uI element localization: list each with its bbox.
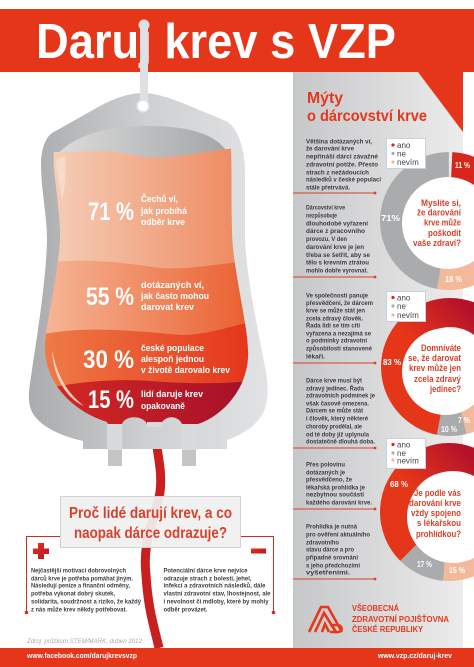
myth text 5: lékařská prohlídka je (306, 484, 365, 492)
myth text 6: zdravotního (306, 540, 339, 546)
myth text 4: dostatečně dlouhá doba. (306, 438, 375, 446)
myth text 3 (306, 292, 373, 360)
source: Zdroj: průzkum STEM/MARK, duben 2012 (26, 637, 142, 645)
logo text: VŠEOBECNÁ (352, 604, 399, 613)
myth text 2: dlouhodobé vyřazení (306, 220, 369, 228)
logo text: ZDRAVOTNÍ POJIŠŤOVNA (352, 615, 449, 624)
myth text 3: zcela zdravý člověk. (306, 316, 363, 322)
myth text 3: přesvědčení, že dárcem (306, 300, 373, 307)
myth text 3: vyřazena a nezajímá se (306, 330, 371, 338)
question box (60, 496, 240, 548)
donut chart 1: 71% (381, 214, 400, 223)
text: reasons for: potřeba vykonat dobrý skutek, (31, 590, 115, 598)
text: reasons for: Nejčastější motivací dobrovolných (31, 568, 126, 574)
myth text 4: choroby prodělal, ale (306, 424, 362, 430)
logo text: ČESKÉ REPUBLIKY (352, 625, 424, 634)
myth text 4: Dárce krve musí být (306, 378, 363, 384)
myth text 3: krve se může stát jen (306, 306, 365, 314)
donut chart 3: 15 % (449, 566, 465, 575)
question 2: jedinec? (429, 384, 461, 395)
myth text 1: Většina dotázaných ví, (306, 138, 372, 146)
legend 2 (386, 292, 426, 322)
myth text 4: i člověk, který některé (306, 416, 368, 422)
myth text 5: dotázaných je (306, 470, 345, 476)
myth text 5: každého darování krve. (306, 500, 372, 506)
text: reasons against: odběr provázet. (164, 606, 208, 614)
donut chart 2 (383, 312, 474, 434)
myth text 5: přesvědčeno, že (306, 476, 352, 484)
myth text 6: pro ověření aktuálního (306, 532, 370, 538)
stat 30 %: alespoň jednou (141, 354, 204, 364)
stat 71 %: Čechů ví, (141, 193, 178, 204)
legend 3 (386, 438, 426, 468)
legend 1: ano (397, 141, 411, 150)
blood bag (29, 20, 268, 466)
legend 2: ne (397, 302, 406, 311)
question 2: zcela zdravý (414, 374, 462, 385)
myth text 2: Dárcovství krve (306, 204, 345, 212)
question 1: krve může (424, 218, 461, 228)
donut chart 2: 7 % (458, 416, 470, 425)
myth text 6: s jeho předchozími (306, 562, 360, 570)
myth text 6: případné srovnání (306, 554, 359, 562)
text: reasons for: Následují peníze a finanční odměny, (31, 582, 130, 590)
panel: myths background (293, 72, 463, 648)
myth text 1: nepřináší dárci závažné (306, 154, 378, 160)
myth text 2: nezpůsobuje (306, 212, 337, 220)
stat 30 % (83, 343, 230, 375)
question 3: prohlídkou? (416, 529, 461, 540)
myth text 5: Přes polovinu (306, 462, 345, 468)
connectors (107, 422, 197, 466)
myth text 1: následků v české populaci (306, 176, 381, 184)
stat 55 %: dotázaných ví, (141, 280, 204, 290)
question 1 (413, 198, 462, 249)
text: reasons against: vlastní zdravotní stav, lhostejnost, ale (164, 590, 271, 598)
myths heading: o dárcovství krve (307, 108, 427, 125)
myths heading (307, 90, 427, 125)
myth text 2 (306, 204, 370, 274)
myth text 2: provozu. V den (306, 236, 347, 243)
question 3: s lékařskou (417, 518, 461, 529)
legend 3: ano (397, 440, 411, 450)
myth text 2: třeba se šetřit, aby se (306, 252, 370, 259)
stat 15 % (88, 386, 203, 414)
question 3 (409, 488, 461, 540)
stat 71 %: 71 % (88, 198, 134, 226)
myth text 3: Řada lidí se tím cítí (306, 320, 361, 330)
text: reasons against: Potenciální dárce krve nejvíce (164, 568, 248, 574)
donut chart 3: 17 % (417, 560, 432, 569)
text: reasons for: z nás může krev někdy potřebovat. (31, 606, 127, 614)
footer link vzp: www.vzp.cz/daruj-krev (377, 651, 453, 660)
myth text 4: zdravotních podmínek je (306, 392, 375, 400)
donut chart 1 (381, 161, 474, 284)
myth text 6 (306, 524, 370, 576)
donut chart 3: 68 % (390, 480, 408, 489)
myth text 6: stavu dárce a pro (306, 546, 354, 554)
legend 2: ano (397, 294, 411, 302)
donut chart 1: 11 % (455, 161, 470, 170)
myth text 2: darování krve je jen (306, 244, 364, 251)
question 2: Domníváte (421, 343, 461, 354)
legend 2: nevím (397, 311, 419, 320)
myth text 4: však časově omezena. (306, 400, 369, 408)
myth text 1: že darování krve (306, 146, 354, 152)
text: reasons against: infekcí a zdravotních následků, dále (164, 582, 266, 590)
myth text 2: tělo s krevním ztrátou (306, 260, 369, 266)
question box: naopak dárce odrazuje? (74, 525, 227, 542)
question 1: že darování (417, 208, 461, 218)
question 3: darování krve (409, 498, 461, 509)
donut chart 2: 83 % (383, 358, 401, 367)
legend 3: nevím (397, 456, 419, 466)
myth text 1: strach z nežádoucích (306, 170, 369, 176)
question 1: poškodit (428, 228, 462, 239)
stat 71 %: jak probíhá (140, 206, 188, 216)
footer band (0, 648, 474, 667)
myth text 4: Dárcem se může stát (306, 406, 364, 414)
icon: plus (33, 543, 49, 559)
question 1: Myslíte si, (421, 198, 461, 209)
bag body (29, 93, 268, 449)
icon: minus (251, 548, 266, 554)
text: reasons for (31, 568, 141, 614)
stat 30 %: 30 % (83, 346, 134, 374)
legend 1 (386, 138, 426, 168)
legend 3: ne (397, 449, 406, 458)
hanger tube (137, 20, 150, 112)
myth text 1: zdravotní potíže. Přesto (306, 162, 378, 168)
myth text 2: dárce z pracovního (306, 228, 365, 235)
stat 15 %: lidí daruje krev (141, 389, 203, 399)
myth text 3: Ve společnosti panuje (306, 292, 368, 300)
title: Daruj krev s VZP (36, 15, 396, 69)
question 2: se, že darovat (408, 353, 462, 364)
stat 71 %: odběr krve (141, 217, 185, 227)
stat 30 %: české populace (141, 343, 204, 353)
question 3: Je podle vás (414, 488, 461, 499)
myth text 4: zdravý jedinec. Řada (306, 384, 364, 392)
brackets (25, 536, 275, 614)
stat 55 % (86, 280, 209, 312)
donut chart 3 (390, 458, 474, 575)
question 2 (408, 343, 462, 395)
myth text 5: nezbytnou součástí (306, 492, 365, 498)
myth text 6: vyšetřeními. (306, 570, 350, 576)
myth text 1: stále přetrvává. (306, 184, 350, 192)
question box: Proč lidé darují krev, a co (69, 505, 232, 522)
bag inner shade (55, 126, 231, 165)
text: reasons against: odrazuje strach z bolesti, jehel, (164, 576, 252, 582)
myth text 6: Prohlídka je nutná (306, 524, 357, 530)
stat 15 %: opakovaně (141, 401, 185, 411)
legend 1: nevím (397, 158, 419, 167)
logo mark (309, 607, 342, 632)
myth text 4 (306, 378, 375, 446)
myth text 5 (306, 462, 372, 506)
myth text 3: lékaři. (306, 354, 325, 360)
liquid levels (40, 148, 250, 430)
blood tube (145, 423, 161, 648)
stat 30 %: v životě darovalo krev (141, 365, 230, 375)
myth text 3: způsobilosti stanovené (306, 344, 372, 352)
text: reasons against: i nevolnost či mdloby, které by mohly (164, 598, 269, 606)
myth text 1 (306, 138, 381, 192)
header band (0, 9, 474, 72)
donut chart 2: 10 % (441, 425, 457, 434)
stat 55 %: 55 % (86, 283, 134, 311)
stat 55 %: jak často mohou (140, 291, 209, 301)
stat 71 % (88, 193, 188, 227)
myth text 2: mohlo dobře vyrovnat. (306, 268, 368, 274)
question 1: vaše zdraví? (413, 238, 461, 249)
text: reasons for: solidarita, soudržnost a riziko, že každý (31, 598, 141, 606)
stat 55 %: darovat krev (141, 302, 194, 312)
text: reasons against (164, 568, 271, 614)
logo text (352, 604, 449, 634)
myth text 4: od té doby již uplynula (306, 432, 369, 438)
legend 1: ne (397, 150, 406, 158)
footer link facebook: www.facebook.com/darujkrevsvzp (26, 651, 137, 660)
donut chart 1: 18 % (445, 275, 462, 284)
myths heading: Mýty (307, 90, 343, 107)
text: reasons for: dárců krve je potřeba pomáhat jiným. (31, 574, 133, 582)
question 3: vždy spojeno (411, 508, 461, 519)
myth text 3: o podmínky zdravotní (306, 338, 368, 344)
question 2: krev může jen (409, 363, 461, 374)
stat 15 %: 15 % (88, 386, 134, 414)
